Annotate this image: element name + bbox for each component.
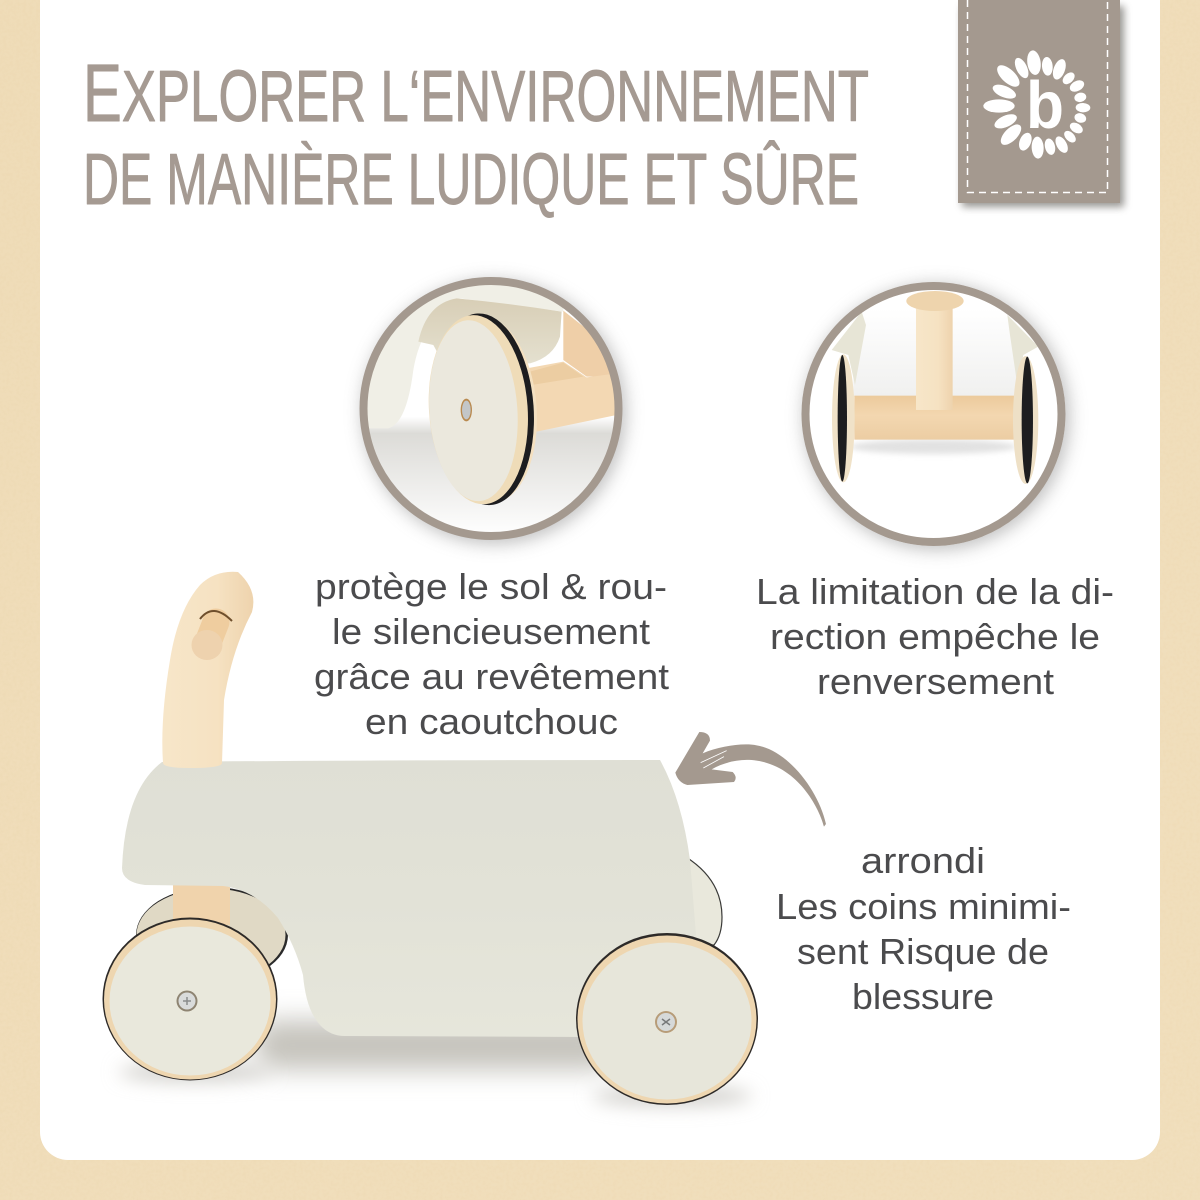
- rear wheels: [136, 857, 722, 983]
- screw: [655, 1011, 677, 1033]
- caption: rubber coating: le silencieusement: [332, 611, 650, 652]
- caption: steering limit: La limitation de la di-: [756, 571, 1114, 612]
- front-right wheel: [576, 933, 758, 1105]
- logo: petal sunburst and letter b: [983, 50, 1090, 159]
- caption: rounded corners: arrondi: [861, 840, 985, 881]
- caption: rounded corners: sent Risque de: [797, 931, 1049, 972]
- handle with peg: [162, 572, 253, 768]
- arrow pointing to rounded body corner: [675, 732, 826, 827]
- title: [83, 48, 869, 220]
- floor shadows: [119, 1020, 752, 1106]
- wooden post: [173, 885, 230, 925]
- curved body: [122, 760, 696, 1037]
- caption: rounded corners: Les coins minimi-: [776, 886, 1071, 927]
- caption: rubber coating: en caoutchouc: [365, 701, 618, 742]
- caption: rounded corners: [776, 840, 1071, 1017]
- title: DE MANIÈRE LUDIQUE ET SÛRE: [83, 140, 859, 220]
- logo: petal sunburst and letter b: b: [1026, 68, 1064, 143]
- caption: rubber coating: [314, 566, 669, 742]
- brand label with logo: [958, 0, 1124, 207]
- wooden ride-on toy: [102, 572, 758, 1106]
- caption: steering limit: rection empêche le: [770, 616, 1100, 657]
- caption: rounded corners: blessure: [852, 976, 994, 1017]
- caption: steering limit: [756, 571, 1114, 702]
- front-left wheel: [102, 918, 278, 1080]
- inset circle: wheel close-up: [350, 277, 630, 543]
- screw: [176, 990, 198, 1012]
- caption: steering limit: renversement: [817, 661, 1054, 702]
- caption: rubber coating: grâce au revêtement: [314, 656, 669, 697]
- title: EXPLORER L‘ENVIRONNEMENT: [83, 48, 869, 139]
- caption: rubber coating: protège le sol & rou-: [315, 566, 667, 607]
- inset circle: steering limit close-up: [802, 282, 1068, 549]
